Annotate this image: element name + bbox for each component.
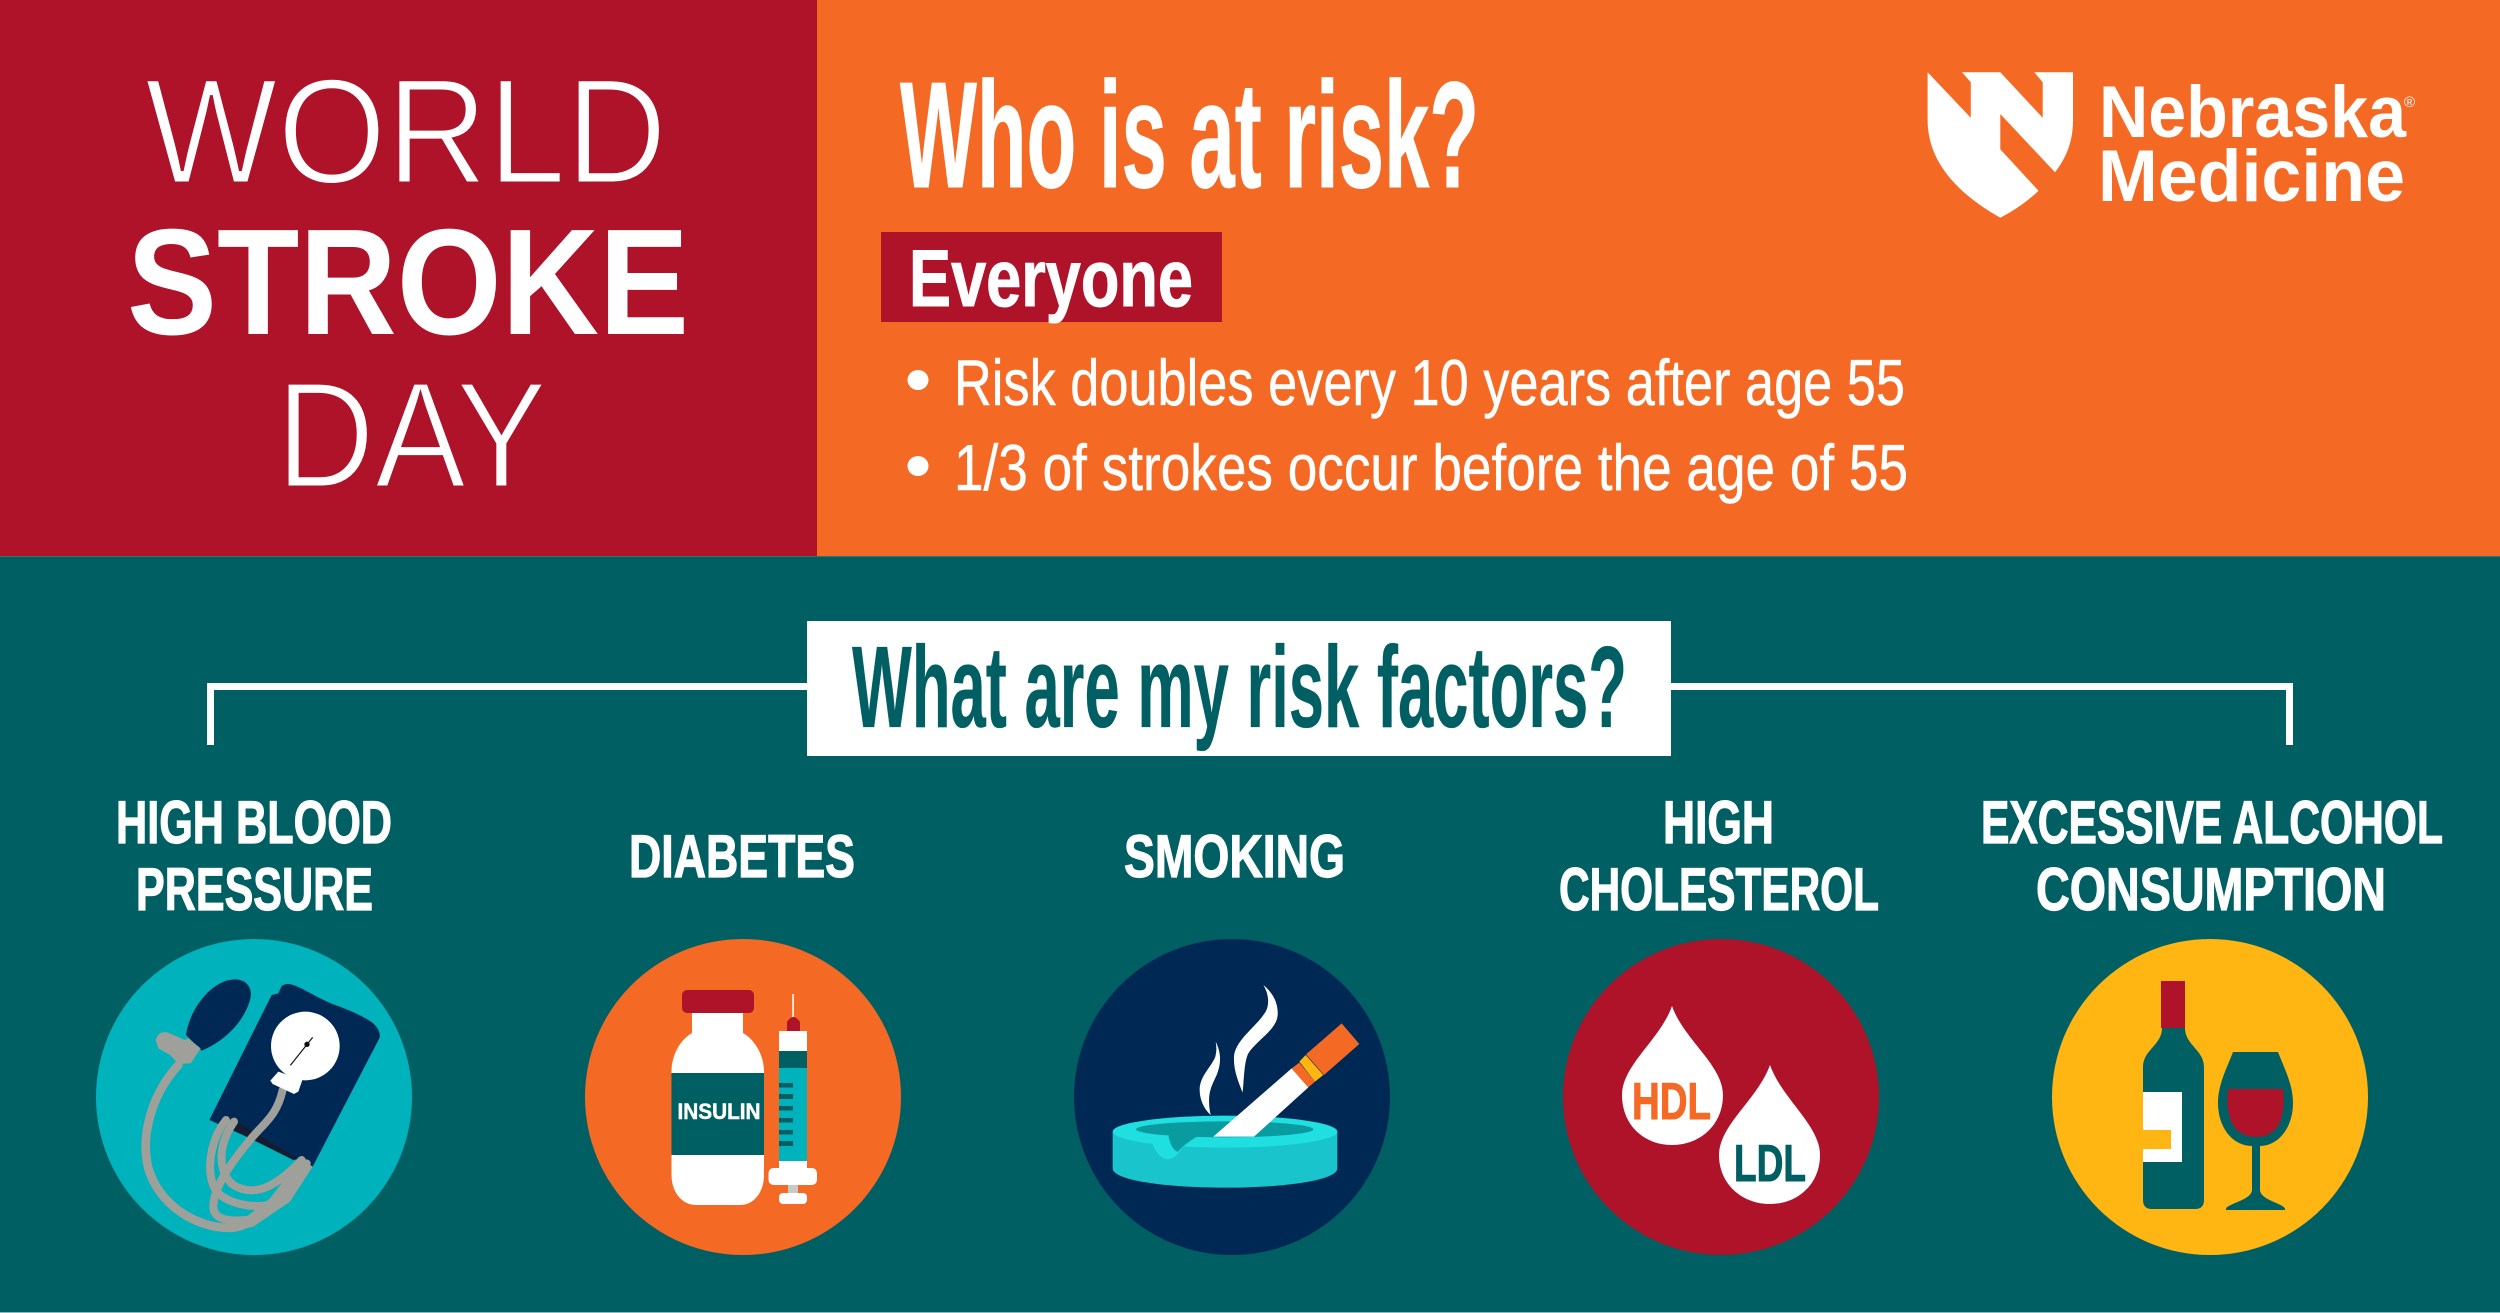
drop: HDL bbox=[1622, 1006, 1723, 1145]
cuff bbox=[209, 984, 380, 1167]
label: excessive alcohol consumption bbox=[1981, 789, 2443, 923]
bottle bbox=[2143, 1028, 2204, 1209]
icon: ashtray and cigarette bbox=[1074, 939, 1390, 1255]
smoke bbox=[1234, 985, 1278, 1093]
gauge bbox=[271, 1012, 340, 1080]
bullet: one third of strokes: 1/3 of strokes occur before the age of 55 bbox=[954, 431, 1908, 504]
bracket: risk factors connector bbox=[207, 683, 2293, 745]
tubes bbox=[146, 1065, 307, 1228]
label: high cholesterol: CHOLESTEROL bbox=[1559, 856, 1879, 923]
heading: who is at risk: Who is at risk? bbox=[900, 50, 1479, 219]
title: DAY: DAY bbox=[276, 350, 547, 519]
label: high cholesterol bbox=[1559, 789, 1879, 923]
logo: nebraska medicine bbox=[1928, 72, 2415, 218]
ashtray bbox=[1113, 1132, 1337, 1188]
icon: blood pressure cuff bbox=[96, 939, 412, 1255]
label: high cholesterol: HIGH bbox=[1663, 789, 1774, 856]
bullet: risk doubles: Risk doubles every 10 years after age 55 bbox=[954, 346, 1905, 419]
label: high blood pressure bbox=[116, 789, 392, 923]
label: high blood pressure: PRESSURE bbox=[136, 856, 373, 923]
icon: shield bbox=[1928, 72, 2073, 218]
logo text: nebraska: Nebraska bbox=[2099, 72, 2407, 153]
logo registered mark: ® bbox=[2404, 94, 2415, 111]
icon: insulin bottle and syringe bbox=[585, 939, 901, 1255]
icon: wine bottle and glass bbox=[2052, 939, 2368, 1255]
cigarette bbox=[1213, 1068, 1308, 1137]
label: diabetes: DIABETES bbox=[629, 823, 855, 890]
label: smoking: SMOKING bbox=[1124, 823, 1345, 890]
bottle bbox=[682, 990, 754, 1013]
panel: who is at risk bbox=[817, 0, 2500, 556]
icon: insulin bottle and syringe: INSULIN bbox=[678, 1099, 760, 1124]
label: excessive alcohol consumption: CONSUMPTION bbox=[2036, 856, 2386, 923]
title: WORLD: WORLD bbox=[145, 47, 667, 215]
logo text: medicine: Medicine bbox=[2098, 136, 2405, 217]
icon: HDL and LDL drops: HDL bbox=[1632, 1073, 1711, 1131]
label: high blood pressure: HIGH BLOOD bbox=[116, 789, 392, 856]
heading box: what are my risk factors: What are my risk factors? bbox=[852, 622, 1627, 752]
syringe bbox=[792, 994, 794, 1017]
icon: HDL and LDL drops: LDL bbox=[1734, 1135, 1806, 1193]
drop: LDL bbox=[1719, 1065, 1820, 1204]
callout: everyone: Everyone bbox=[909, 234, 1193, 324]
title: STROKE: STROKE bbox=[127, 197, 689, 366]
heading box: what are my risk factors bbox=[807, 621, 1671, 756]
glass bbox=[2218, 1052, 2293, 1210]
icon: HDL and LDL drops bbox=[1563, 939, 1879, 1255]
bulb bbox=[186, 979, 251, 1051]
panel: world stroke day title bbox=[0, 0, 817, 556]
